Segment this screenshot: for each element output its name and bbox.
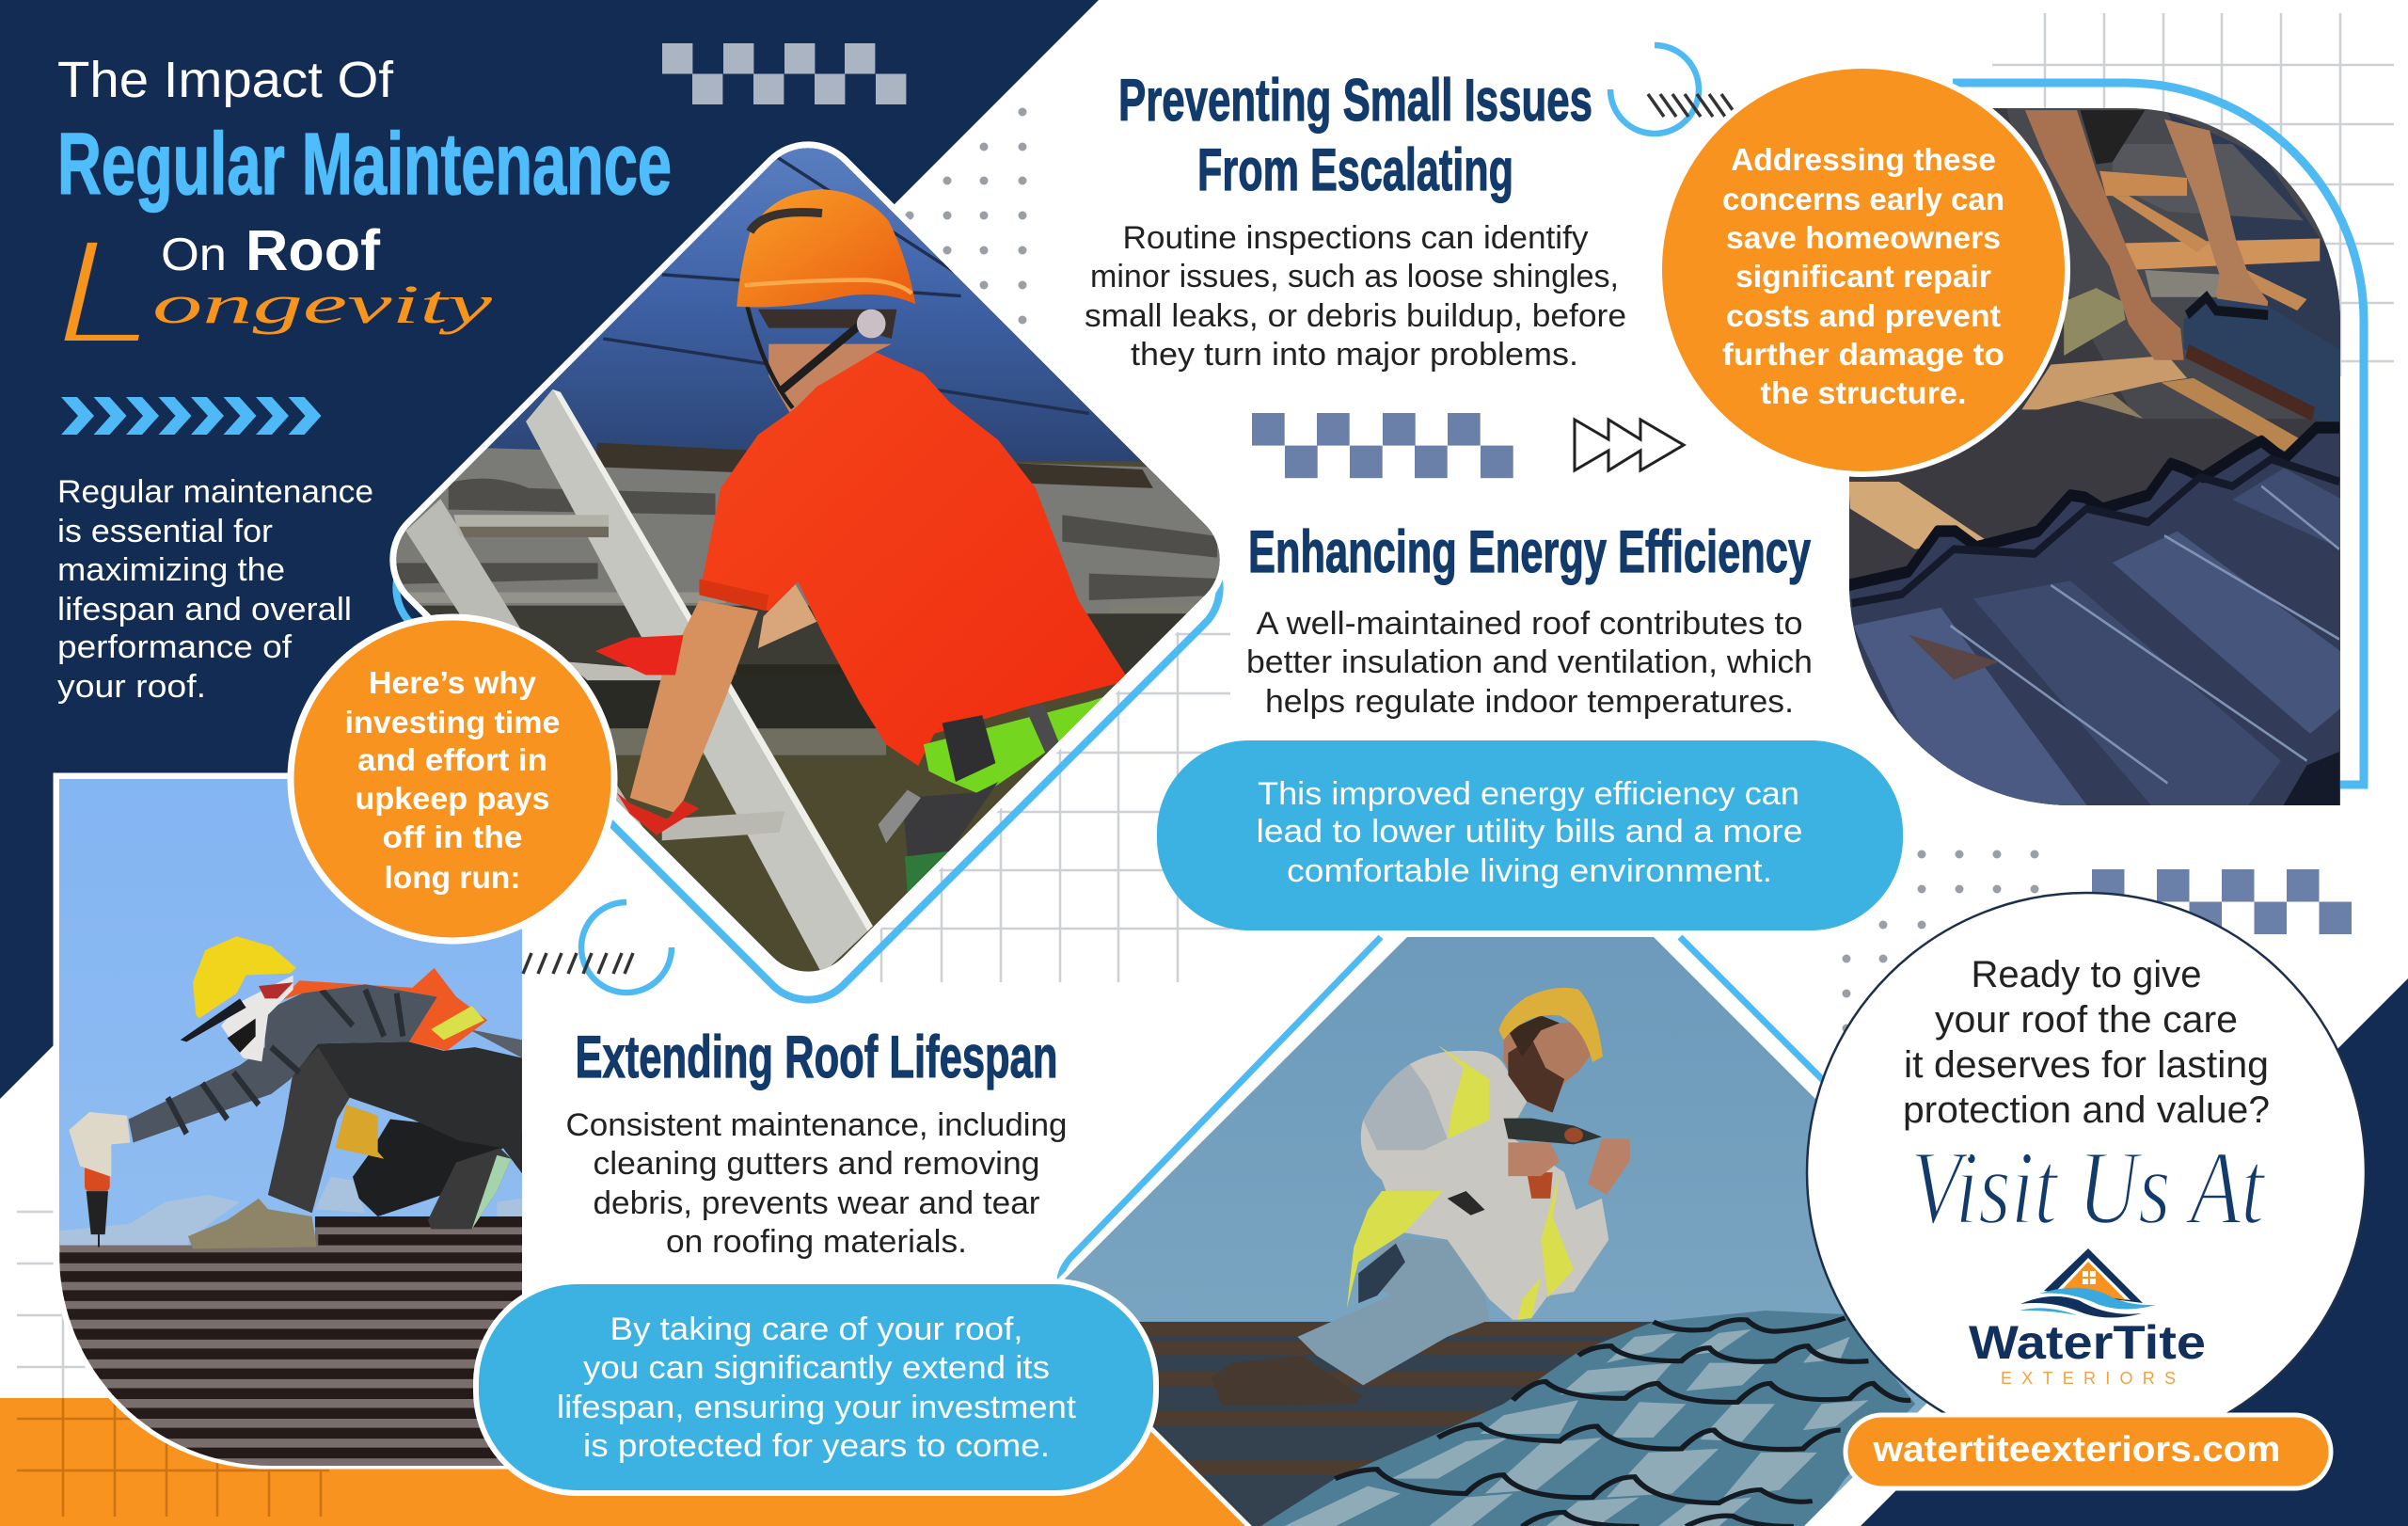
photo frame: lower worker accent right [1680, 937, 1825, 1082]
intro paragraph: performance of [57, 629, 293, 665]
photo frame: left worker border [56, 776, 522, 1466]
dot grid lower right [1842, 850, 2039, 1033]
dot grid upper centre [905, 107, 1027, 324]
callout: orange addressing these concerns [1659, 66, 2067, 474]
intro paragraph: is essential for [57, 514, 273, 549]
callout: orange addressing these concerns: significant repair [1735, 259, 1991, 294]
callout: orange why investing [291, 617, 614, 941]
checker pattern middle [1252, 413, 1513, 478]
photo frame: roof tiles outline [1953, 83, 2364, 785]
text: extending roof lifespan: cleaning gutters and removing [593, 1146, 1040, 1182]
text: call to action question: Ready to give [1972, 954, 2201, 995]
callout: orange addressing these concerns: the structure. [1761, 375, 1966, 410]
callout: blue energy efficiency pill [1157, 740, 1903, 930]
text: preventing small issues: small leaks, or debris buildup, before [1085, 298, 1626, 334]
title block: The Impact Of [57, 52, 394, 108]
text: preventing small issues [1085, 220, 1626, 373]
text: preventing small issues: they turn into major problems. [1131, 337, 1578, 373]
background: orange band bottom-left [0, 1398, 1265, 1526]
title block: L [55, 207, 156, 375]
title block: Regular Maintenance [57, 115, 672, 213]
text: enhancing energy efficiency: A well-maintained roof contributes to [1257, 606, 1802, 642]
text: extending roof lifespan: on roofing materials. [666, 1224, 967, 1260]
logo: WaterTite Exteriors: WaterTite [1969, 1316, 2206, 1369]
callout: blue energy efficiency pill: This improved energy efficiency can [1258, 776, 1799, 812]
callout: blue lifespan pill: is protected for years to come. [583, 1428, 1050, 1464]
callout: orange why investing: upkeep pays [356, 781, 549, 816]
text: call to action question: it deserves for lasting [1904, 1044, 2269, 1086]
callout: orange addressing these concerns: further damage to [1722, 337, 2004, 372]
callout: orange why investing: and effort in [357, 742, 547, 777]
heading: extending roof lifespan: Extending Roof Lifespan [576, 1025, 1057, 1090]
checker pattern lower right [2092, 869, 2352, 934]
panel: call to action circle [1807, 893, 2366, 1452]
title block: On [161, 230, 227, 280]
title block [55, 52, 672, 375]
intro paragraph: maximizing the [57, 552, 285, 588]
callout: orange addressing these concerns: save homeowners [1726, 220, 2001, 255]
text: call to action question: protection and value? [1903, 1089, 2270, 1131]
heading: preventing small issues: From Escalating [1197, 137, 1513, 203]
photo: worker in red shirt climbing ladder [389, 135, 1244, 990]
text: enhancing energy efficiency: helps regulate indoor temperatures. [1265, 684, 1794, 720]
intro paragraph: lifespan and overall [57, 592, 352, 628]
callout: orange why investing: Here’s why [369, 665, 537, 700]
photo: worker with drill on teal roof [1057, 937, 1926, 1526]
text: extending roof lifespan [566, 1107, 1067, 1260]
background: navy corner top-left [0, 0, 1099, 1099]
callout: blue lifespan pill: you can significantly extend its [583, 1350, 1050, 1386]
callout: blue lifespan pill: By taking care of your roof, [610, 1311, 1023, 1347]
callout: orange addressing these concerns: costs and prevent [1726, 298, 2001, 333]
button: website url: watertiteexteriors.com [1872, 1430, 2280, 1470]
intro paragraph: your roof. [57, 669, 206, 705]
text: enhancing energy efficiency [1246, 606, 1813, 720]
text: enhancing energy efficiency: better insulation and ventilation, which [1246, 644, 1813, 680]
decorative arc and hatch near first heading [1610, 45, 1737, 134]
button: website url [1846, 1415, 2331, 1488]
intro paragraph: Regular maintenance [57, 474, 373, 510]
intro paragraph [57, 474, 373, 705]
decorative arc and hatch near extending heading [523, 902, 672, 993]
text: call to action question [1903, 954, 2270, 1131]
callout: blue energy efficiency pill: comfortable living environment. [1287, 853, 1772, 889]
logo: WaterTite Exteriors [1969, 1248, 2206, 1388]
script: visit us at: Visit Us At [1910, 1130, 2266, 1247]
callout: orange why investing: long run: [384, 860, 521, 895]
photo frame: lower worker accent left [1060, 937, 1381, 1281]
heading: preventing small issues: Preventing Small Issues [1118, 68, 1592, 134]
callout: orange why investing: investing time [344, 705, 561, 739]
logo: WaterTite Exteriors: EXTERIORS [2001, 1369, 2176, 1388]
callout: orange addressing these concerns: Addressing these [1731, 142, 1996, 177]
arrow: outlined triple head [1575, 420, 1684, 470]
diamond accent outline [375, 155, 1241, 1021]
photo: worker with yellow helmet on roof [56, 776, 531, 1469]
text: extending roof lifespan: Consistent maintenance, including [566, 1107, 1067, 1143]
diamond white border [375, 127, 1241, 993]
heading: enhancing energy efficiency: Enhancing Energy Efficiency [1248, 519, 1811, 585]
title block: ongevity [152, 274, 492, 335]
text: preventing small issues: minor issues, such as loose shingles, [1090, 259, 1619, 294]
callout: orange addressing these concerns: concerns early can [1722, 182, 2004, 216]
callout: orange why investing: off in the [382, 819, 523, 854]
heading: preventing small issues [1118, 68, 1592, 203]
checker pattern top left [662, 43, 906, 104]
text: extending roof lifespan: debris, prevents wear and tear [593, 1185, 1040, 1221]
chevron row [61, 397, 322, 435]
text: call to action question: your roof the care [1935, 999, 2238, 1041]
callout: blue energy efficiency pill: lead to lower utility bills and a more [1257, 814, 1802, 850]
title block: Roof [246, 218, 381, 282]
photo: hands laying roof tiles [1837, 94, 2355, 824]
text: preventing small issues: Routine inspections can identify [1123, 220, 1588, 256]
callout: blue lifespan pill [476, 1281, 1156, 1493]
callout: blue lifespan pill: lifespan, ensuring your investment [557, 1390, 1077, 1425]
background: navy corner bottom-right [1861, 978, 2408, 1526]
